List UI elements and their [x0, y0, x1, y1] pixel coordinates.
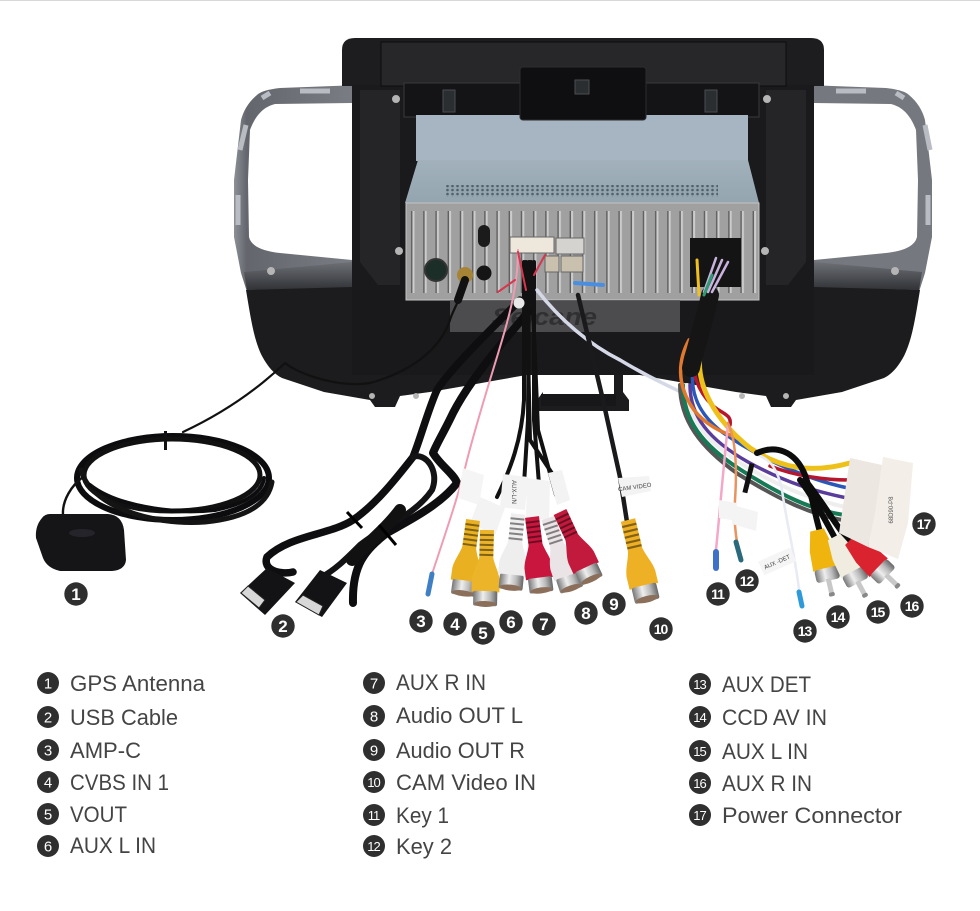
callout 3	[409, 609, 433, 633]
trim highlights	[238, 91, 930, 225]
bezel top inset	[381, 42, 786, 86]
plug 9 red	[547, 506, 605, 588]
harness white wire	[687, 385, 845, 507]
GPS wire from unit	[183, 283, 465, 432]
lower body band	[352, 290, 814, 375]
harness orange wire	[681, 340, 738, 438]
AUX DET tag	[758, 547, 796, 575]
legend column 1	[37, 671, 206, 858]
connector label: 68D90-P8	[889, 496, 895, 524]
AMP-C tag	[458, 468, 484, 505]
white notch	[543, 370, 614, 394]
black cables to male plugs	[757, 449, 850, 542]
coil of cable	[77, 436, 269, 520]
callout 17	[912, 512, 936, 536]
RCA tags	[470, 470, 570, 535]
wing grey shoulder left	[244, 262, 352, 290]
notch bar	[541, 394, 616, 406]
legend item 1: GPS Antenna	[70, 671, 206, 696]
AV black cables	[497, 262, 563, 500]
legend item 4: CVBS IN 1	[70, 770, 169, 795]
GPS antenna puck	[36, 514, 126, 571]
vent grid	[446, 185, 718, 197]
legend item 7: 7	[370, 676, 378, 692]
harness red wire	[693, 340, 849, 480]
bezel screws	[267, 95, 899, 399]
legend item 15	[689, 739, 808, 764]
legend item 11	[363, 803, 449, 828]
CAM tag text: CAM VIDEO	[618, 483, 652, 493]
legend item 14: CCD AV IN	[722, 705, 827, 730]
plug 8 white	[535, 514, 586, 595]
cable tie	[164, 431, 167, 450]
RCA male plugs	[804, 527, 908, 603]
legend item 3	[37, 738, 141, 763]
legend item 6: AUX L IN	[70, 833, 156, 858]
legend item 13	[689, 672, 811, 697]
callout 5	[471, 621, 495, 645]
grey-white wire	[537, 290, 690, 396]
harness purple wire	[690, 385, 847, 498]
lower connector blocks	[545, 256, 583, 272]
harness wire yellow up	[697, 260, 699, 295]
USB socket one	[241, 586, 265, 608]
blue tip	[428, 574, 432, 594]
legend item 14: 14	[693, 710, 706, 725]
harness grey wire	[680, 385, 842, 520]
key tags	[719, 500, 758, 531]
pink Key 1 wire	[716, 425, 728, 550]
wiring harness	[680, 258, 850, 606]
callout 8: 8	[581, 604, 591, 623]
callout 4: 4	[450, 615, 460, 634]
harness wires at socket	[704, 258, 728, 292]
bezel top block	[342, 38, 824, 86]
legend item 8: Audio OUT L	[396, 703, 523, 728]
legend item 10: CAM Video IN	[396, 770, 536, 795]
legend item 3: 3	[44, 742, 52, 760]
legend item 5: VOUT	[70, 802, 127, 827]
camera tag	[618, 476, 651, 497]
pink AMP-C wire	[430, 250, 518, 580]
callout 11: 11	[711, 586, 725, 602]
legend item 16: AUX R IN	[722, 771, 812, 796]
callout 9: 9	[609, 595, 619, 614]
callout 16: 16	[905, 598, 919, 614]
black power socket	[690, 238, 741, 287]
legend item 9: Audio OUT R	[396, 738, 525, 763]
USB plug one	[240, 568, 295, 615]
white connector block	[510, 237, 554, 253]
connector right block	[868, 457, 913, 559]
legend item 2: USB Cable	[70, 705, 178, 730]
harness blue wire	[692, 370, 848, 488]
oval slot	[478, 225, 490, 247]
plug 4 yellow	[449, 518, 487, 598]
callout 14	[826, 605, 850, 629]
legend column 3	[689, 672, 902, 828]
camera black cable	[578, 295, 627, 522]
blue tip by connector	[575, 283, 603, 285]
legend column 2	[363, 670, 536, 859]
legend item 11: 11	[368, 808, 380, 823]
callout 4	[443, 612, 467, 636]
plug 7 red	[518, 515, 556, 595]
right side trim ring	[806, 85, 932, 295]
USB cable two	[353, 310, 530, 603]
legend item 8: 8	[370, 708, 378, 726]
watermark band	[450, 300, 680, 332]
legend item 6	[37, 833, 156, 858]
AUX tag text: AUX-L/N	[510, 480, 516, 504]
callout 13: 13	[798, 623, 812, 639]
legend item 5: 5	[44, 806, 52, 824]
legend item 12	[363, 834, 452, 859]
wing grey shoulder right	[814, 262, 922, 290]
legend item 4: 4	[44, 774, 52, 792]
callout 12	[735, 569, 759, 593]
left side trim ring	[234, 85, 360, 295]
callout 6	[499, 610, 523, 634]
antenna socket	[425, 259, 447, 281]
callout 1: 1	[71, 585, 81, 604]
coil fourth turn	[90, 478, 264, 511]
legend item 15: AUX L IN	[722, 739, 808, 764]
side bracket left	[360, 90, 400, 285]
callout 2	[271, 614, 295, 638]
callout 15	[866, 600, 890, 624]
legend item 15: 15	[693, 744, 706, 759]
gold connector	[457, 267, 473, 283]
legend item 16: 16	[693, 776, 706, 791]
plug 5 yellow	[471, 530, 501, 607]
red and green wires	[498, 252, 545, 292]
callout 7	[532, 612, 556, 636]
bezel centre column	[352, 85, 814, 300]
watermark: Seicane	[492, 304, 597, 331]
plug 6 white	[496, 513, 532, 592]
gold connector cable	[458, 280, 465, 300]
USB plug two	[295, 570, 347, 617]
callout 8	[574, 601, 598, 625]
legend item 12: 12	[367, 839, 380, 854]
bundle black sleeve	[691, 295, 710, 368]
grey connector block	[556, 238, 584, 254]
coil second turn	[84, 439, 260, 511]
callout 14: 14	[831, 609, 845, 625]
faceplate	[406, 203, 759, 300]
callout 11	[706, 582, 730, 606]
AUX DET wire	[757, 455, 799, 590]
top rule	[0, 0, 980, 1]
USB cables	[240, 300, 530, 617]
male plug red	[841, 531, 908, 597]
harness wire green up	[704, 275, 712, 295]
unit top cover	[405, 160, 759, 203]
callout 3: 3	[416, 612, 426, 631]
legend item 6: 6	[44, 838, 52, 856]
coil third turn	[81, 470, 272, 522]
upper inset plate	[404, 83, 759, 117]
legend item 10: 10	[367, 775, 380, 790]
Key 2 tip	[736, 542, 741, 560]
callout 5: 5	[478, 624, 488, 643]
connector left block	[839, 458, 882, 547]
clip details	[443, 80, 717, 112]
callout 10	[649, 617, 673, 641]
male plug white	[823, 531, 877, 603]
central cables	[428, 250, 690, 594]
central tab	[520, 67, 646, 120]
callout 10: 10	[654, 621, 668, 637]
Key 1 tip	[713, 552, 719, 568]
legend item 13: 13	[693, 677, 706, 692]
round port	[476, 266, 492, 280]
side bracket right	[766, 90, 806, 285]
power connector	[839, 457, 913, 559]
orange Key 2 wire	[728, 423, 737, 542]
harness yellow wire	[699, 355, 850, 468]
legend item 2: 2	[44, 710, 52, 726]
legend item 12: Key 2	[396, 834, 452, 859]
USB socket two	[296, 595, 323, 615]
white cable tie	[514, 298, 524, 308]
legend item 11: Key 1	[396, 803, 449, 828]
blue-grey chassis back	[416, 115, 748, 161]
USB flat strap	[352, 510, 400, 560]
legend item 1: 1	[44, 676, 52, 692]
AUX DET tip	[799, 592, 802, 606]
callout 17: 17	[917, 516, 931, 532]
callout 6: 6	[506, 613, 516, 632]
wire to antenna	[63, 477, 83, 515]
callout 12: 12	[740, 573, 754, 589]
head unit with dash bezel	[234, 38, 932, 411]
RCA female plugs	[449, 506, 662, 607]
callout 15: 15	[871, 604, 885, 620]
USB loop	[320, 456, 434, 578]
GPS cable and loop	[63, 280, 465, 522]
legend item 17: Power Connector	[722, 803, 902, 828]
USB cable one	[266, 300, 520, 573]
plug 10 yellow	[614, 517, 662, 606]
lower black wings	[246, 285, 920, 411]
harness green wire	[683, 385, 844, 515]
legend item 7: AUX R IN	[396, 670, 486, 695]
callout 13	[793, 619, 817, 643]
callout 9	[602, 592, 626, 616]
callout numbers	[64, 512, 936, 645]
callout 1	[64, 582, 88, 606]
antenna logo	[69, 529, 95, 537]
legend item 3: AMP-C	[70, 738, 141, 763]
cable ties	[347, 512, 396, 545]
bundle tie	[742, 463, 755, 493]
callout 2: 2	[278, 617, 288, 636]
legend item 5	[37, 802, 127, 827]
legend item 9: 9	[370, 742, 378, 760]
legend item 17: 17	[693, 808, 706, 823]
male plug yellow	[804, 527, 845, 599]
callout 7: 7	[539, 615, 549, 634]
legend item 13: AUX DET	[722, 672, 811, 697]
callout 16	[900, 594, 924, 618]
tag text: AUX -DET	[763, 554, 792, 571]
